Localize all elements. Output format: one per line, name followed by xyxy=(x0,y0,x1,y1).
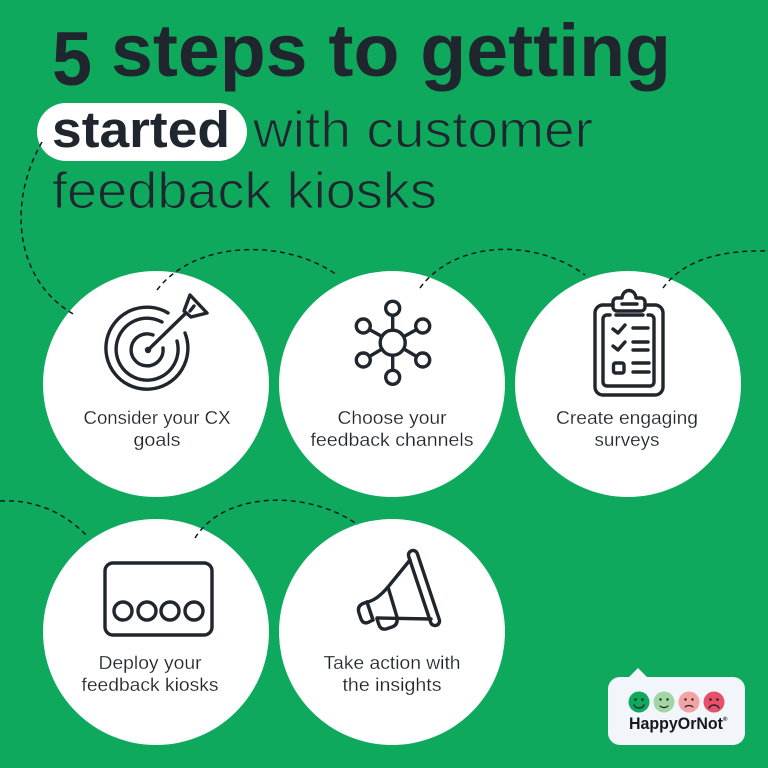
dashed connector: step 1 to step 2 xyxy=(157,250,337,290)
icon: network xyxy=(356,301,430,384)
face: very happy xyxy=(628,692,650,712)
panel: step 5: the insights xyxy=(342,674,442,695)
label: Take action with xyxy=(324,652,460,673)
highlight pill xyxy=(37,103,247,161)
wordmark: HappyOrNot xyxy=(629,715,723,733)
face: unhappy xyxy=(678,692,700,712)
face: very unhappy xyxy=(704,692,724,712)
icon: clipboard checklist xyxy=(595,290,663,395)
title: started xyxy=(52,101,230,158)
label: Consider your CX xyxy=(84,407,230,428)
title: 5 xyxy=(52,17,92,102)
label: Deploy your xyxy=(98,652,202,673)
title: with customer xyxy=(252,101,593,158)
logo: HappyOrNot xyxy=(608,668,745,745)
dashed connector: title to step 1 xyxy=(21,142,75,315)
icon: target xyxy=(106,295,207,389)
dashed connector: step 3 to step 4 xyxy=(663,251,768,288)
label: Choose your xyxy=(338,407,446,428)
panel: step 3 xyxy=(515,271,741,497)
logo: HappyOrNot: ® xyxy=(723,716,728,723)
panel: step 1 xyxy=(43,271,269,497)
face: happy xyxy=(654,692,674,712)
title xyxy=(37,9,671,219)
panel: step 4 xyxy=(43,519,269,745)
panel: step 5 xyxy=(279,519,505,745)
panel: step 2 xyxy=(279,271,505,497)
icon: megaphone xyxy=(358,550,440,629)
dashed connector: into step 4 xyxy=(0,501,87,536)
title: feedback kiosks xyxy=(52,162,437,219)
title: steps to getting xyxy=(111,9,671,92)
dashed connector: step 2 to step 3 xyxy=(420,249,585,288)
icon: kiosk xyxy=(105,563,212,635)
panel: step 4: feedback kiosks xyxy=(82,674,218,695)
panel: step 1: goals xyxy=(134,429,180,450)
dashed connector: step 4 to step 5 xyxy=(195,500,358,538)
panel: step 2: feedback channels xyxy=(310,429,474,450)
label: Create engaging xyxy=(556,407,698,428)
panel: step 3: surveys xyxy=(594,429,660,450)
